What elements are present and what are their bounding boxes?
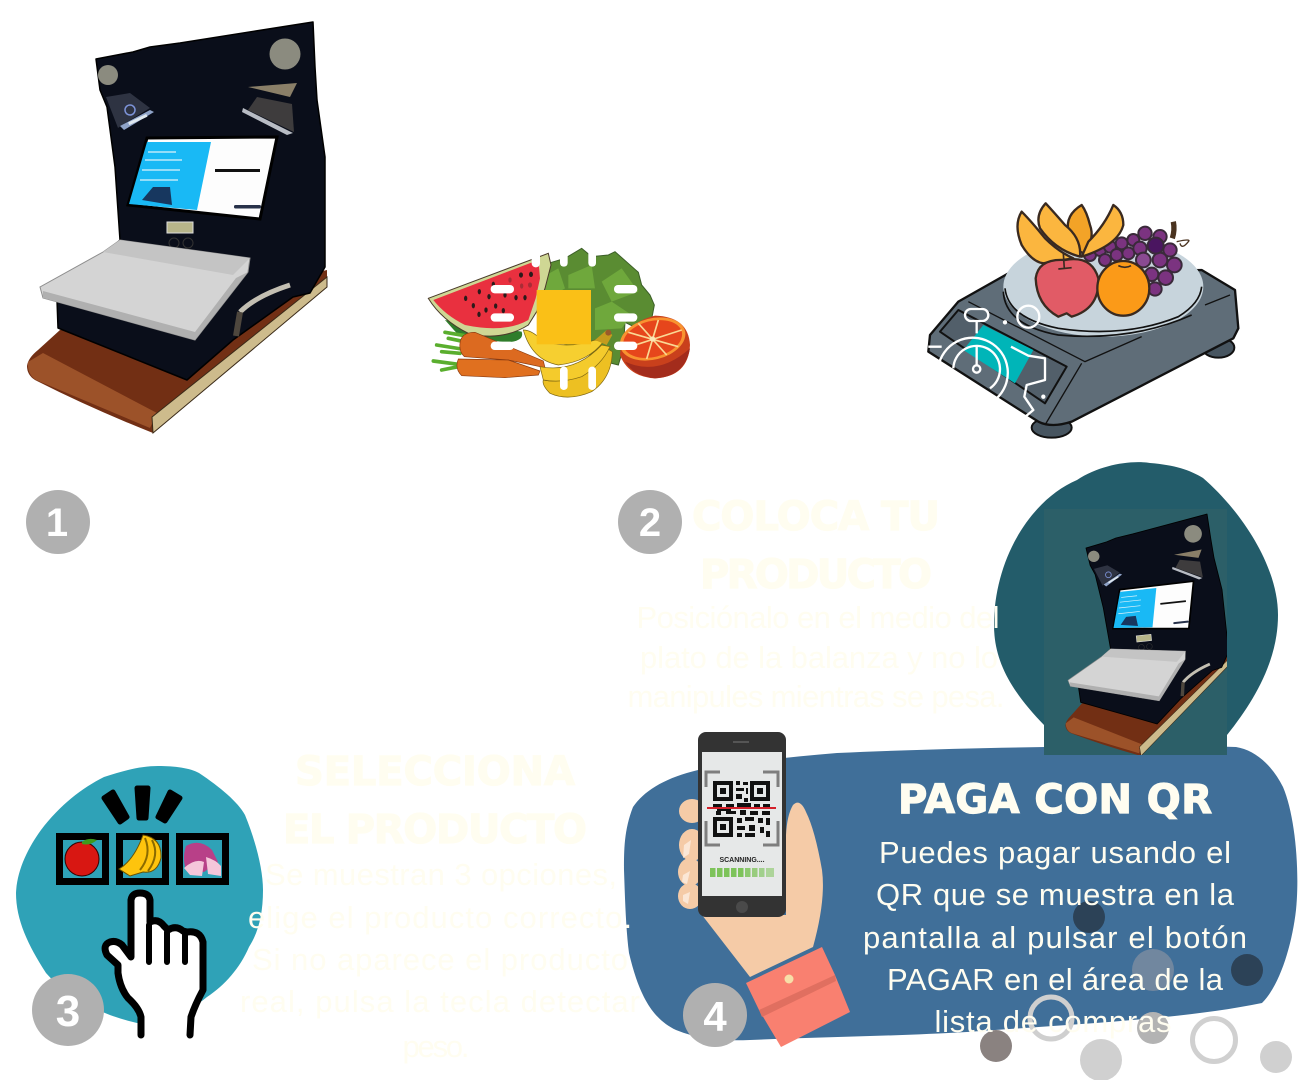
badge: step 1 number bbox=[26, 490, 90, 554]
icon: attention rays bbox=[104, 788, 180, 822]
body: QR que se muestra en la bbox=[876, 877, 1235, 912]
cuff button bbox=[784, 974, 794, 984]
panel: step 3 teal blob bbox=[16, 766, 263, 1023]
body: lista de compras bbox=[934, 1004, 1172, 1039]
badge: step 3 number bbox=[32, 974, 104, 1046]
body: real, pulsa la tecla detectar bbox=[240, 984, 640, 1019]
body: PAGAR en el área de la bbox=[887, 962, 1224, 997]
fingers bbox=[678, 799, 705, 909]
badge: step 4 number bbox=[683, 983, 747, 1047]
icon: pointing hand bbox=[105, 893, 203, 1035]
text: step 3 bbox=[240, 749, 640, 1064]
body: elige el producto correcto. bbox=[248, 900, 632, 935]
scan brackets bbox=[706, 772, 778, 845]
heading bbox=[283, 749, 587, 853]
icon: blood orange bbox=[615, 311, 690, 378]
panel: step 2 scale illustration bbox=[928, 203, 1238, 438]
icon: bananas in plate bbox=[1017, 203, 1123, 263]
heading: COLOCA TU bbox=[692, 494, 940, 540]
badge: step 1 number: 1 bbox=[46, 501, 68, 545]
white dashes bbox=[491, 247, 637, 390]
body: Posiciónalo en el medio del bbox=[636, 600, 1000, 635]
heading bbox=[692, 494, 940, 598]
body bbox=[628, 600, 1004, 714]
speaker and home button bbox=[733, 741, 749, 743]
panel: step 4 blue blob bbox=[624, 746, 1297, 1040]
body: Si no aparece el producto bbox=[252, 942, 628, 977]
yellow block bbox=[537, 290, 591, 344]
qr code bbox=[713, 781, 770, 837]
heading: SELECCIONA bbox=[295, 749, 575, 795]
tile: apple bbox=[60, 836, 106, 882]
icon: stopwatch overlay bbox=[928, 306, 1045, 418]
icon: lettuce bbox=[536, 248, 654, 365]
icon: scale body bbox=[928, 270, 1238, 425]
icon: hand holding phone bbox=[678, 732, 850, 1047]
icon: bananas bbox=[523, 330, 612, 397]
decorative bubbles bbox=[980, 901, 1292, 1080]
badge: step 2 number: 2 bbox=[639, 501, 661, 545]
panel: step 1 kiosk illustration bbox=[27, 22, 327, 433]
panel: step 2 produce illustration bbox=[428, 247, 690, 397]
heading: PAGA CON QR bbox=[898, 777, 1212, 823]
badge: step 2 number bbox=[618, 490, 682, 554]
icon: product option tiles bbox=[60, 835, 226, 882]
icon: watermelon slice bbox=[428, 253, 551, 342]
scan line bbox=[707, 807, 776, 809]
fingertips bbox=[682, 840, 691, 904]
badge: step 3 number: 3 bbox=[56, 987, 80, 1036]
panel: kiosk photo in teal frame bbox=[1044, 509, 1240, 764]
text: step 4 bbox=[863, 777, 1247, 1039]
body: plato de la balanza y no lo bbox=[640, 640, 998, 675]
badge: step 4 number: 4 bbox=[703, 993, 727, 1040]
shirt cuff bbox=[746, 947, 850, 1047]
icon: finger lines bbox=[149, 925, 185, 962]
body: Puedes pagar usando el bbox=[879, 835, 1231, 870]
scanning text: SCANNING.... bbox=[719, 857, 765, 864]
text: step 2 bbox=[628, 494, 1004, 714]
icon: carrots bbox=[433, 332, 545, 378]
panel: dark teal egg blob bbox=[994, 462, 1278, 760]
phone body bbox=[698, 732, 786, 917]
body: Se muestran 3 opciones, bbox=[265, 857, 617, 892]
icon: grapes bbox=[1084, 227, 1182, 296]
body bbox=[863, 835, 1247, 1039]
tile: onion bbox=[180, 836, 226, 882]
body: peso. bbox=[402, 1029, 470, 1064]
body bbox=[240, 857, 640, 1064]
heading: EL PRODUCTO bbox=[283, 807, 587, 853]
phone screen bbox=[702, 752, 782, 896]
icon: feet bbox=[1032, 338, 1234, 438]
progress bar bbox=[710, 868, 774, 877]
heading: PRODUCTO bbox=[700, 552, 932, 598]
body: pantalla al pulsar el botón bbox=[863, 920, 1247, 955]
icon: plate bbox=[1003, 237, 1203, 337]
icon: orange bbox=[1097, 261, 1149, 316]
body: manipules mientras se pesa. bbox=[628, 679, 1004, 714]
tile: banana bbox=[119, 835, 166, 882]
icon: apple bbox=[1036, 259, 1098, 317]
hand bbox=[702, 803, 823, 977]
